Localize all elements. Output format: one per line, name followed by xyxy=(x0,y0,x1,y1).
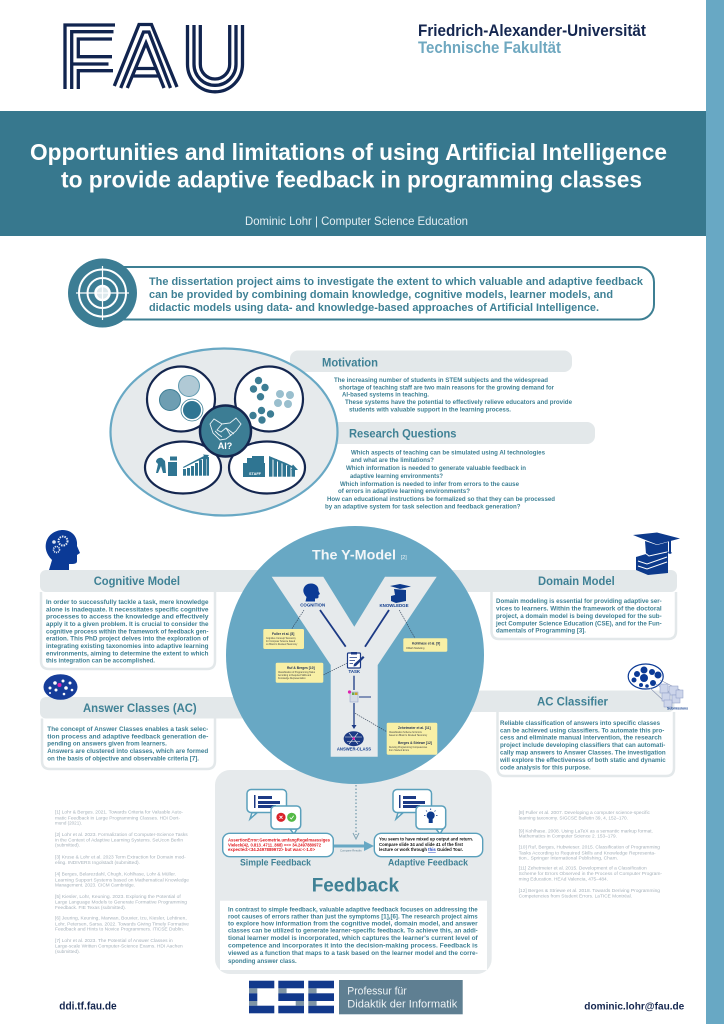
adaptive feedback message: You seem to have mixed up output and return. xyxy=(379,837,473,842)
title: Opportunities and limitations of using Artificial Intelligence xyxy=(30,139,667,165)
centre circle: AI handshake xyxy=(200,406,251,456)
body text: project include developing classifiers that can automati- xyxy=(500,742,665,749)
note: Fuller et al.: Cognitive Concept Taxonomy xyxy=(266,637,297,640)
references right: [11] Zehetmeier et al. 2015. Development of a Classification xyxy=(519,865,647,870)
university name: Friedrich-Alexander-Universität xyxy=(418,22,646,40)
arrow: code to answer class xyxy=(352,703,356,729)
panel: feedback xyxy=(215,770,492,974)
note: Ruf and Berges: Ruf & Berges [10] xyxy=(287,666,315,670)
text: research questions: Which information is needed to infer from errors to the cause xyxy=(340,482,520,488)
icon: target xyxy=(68,258,137,328)
references right: [9] Kohlhase. 2008. Using LaTeX as a semantic markup format. xyxy=(519,828,653,833)
university name: Technische Fakultät xyxy=(418,39,561,57)
body text: classes can be utilized to generate learner-specific feedback. To achieve this, an addi- xyxy=(228,928,478,935)
references right: [10] Ruf, Berges, Hubwieser. 2015. Classification of Programming xyxy=(519,845,661,850)
text area xyxy=(220,901,487,970)
sidebar xyxy=(706,0,724,1024)
body text: processes to access the knowledge and effectively xyxy=(46,614,209,621)
goal text: The dissertation project aims to investigate the extent to which valuable and adaptive feedback xyxy=(149,276,644,288)
note: Zehetmeier and Berges xyxy=(387,723,437,755)
references right: learning taxonomy. SIGCSE Bulletin 39, 4, 152–170. xyxy=(519,815,628,820)
note: Zehetmeier and Berges: from Student Errors xyxy=(389,749,410,752)
references left xyxy=(55,810,190,954)
node: cognition xyxy=(300,584,325,608)
body text: integrating existing taxonomies into adaptive learning xyxy=(46,643,209,650)
body text: to explore how information from the cognitive model, domain model, and answer xyxy=(228,921,478,928)
references right: Mathematics in Computer Science 2. 153–179. xyxy=(519,834,617,839)
centre circle: AI handshake: AI? xyxy=(218,441,232,451)
body text: code analysis for this purpose. xyxy=(500,764,591,771)
panel: project goal xyxy=(68,258,654,328)
simple feedback message xyxy=(223,833,333,857)
references left: [7] Lohr et al. 2023. The Potential of Answer Classes in xyxy=(55,938,173,943)
heading: research questions: Research Questions xyxy=(349,428,457,440)
body text: alone is inadequate. It necessitates specific cognitive xyxy=(46,606,209,613)
references left: [6] Jeuring, Keuning, Marwan, Bouvier, Izu, Kiesler, Lehtinen, xyxy=(55,916,187,921)
body text: tional learner model is incorporated, which captures the learner's current level of xyxy=(228,935,479,942)
arrow: simple to adaptive xyxy=(333,841,374,852)
heading: feedback: Feedback xyxy=(312,876,399,897)
body text: on the basis of objective and observable criteria [7]. xyxy=(47,755,199,762)
note: Zehetmeier and Berges: Berges & Striewe [12] xyxy=(398,741,432,745)
label: adaptive feedback: Adaptive Feedback xyxy=(388,858,469,868)
heading: the Y-model: The Y-Model xyxy=(312,546,396,562)
text: research questions: How can educational instructions be formalized so that they can be processed xyxy=(327,497,555,503)
circle: student groups xyxy=(147,366,215,432)
references right: [8] Fuller et al. 2007. Developing a computer science-specific xyxy=(519,810,651,815)
body text: can be achieved using classifiers. To automate this pro- xyxy=(500,727,664,734)
references left: in the Context of Adaptive Learning Systems. SeUcon Berlin xyxy=(55,837,184,842)
header bar: AC classifier xyxy=(400,690,674,712)
body text: vices to learners. Within the framework of the doctoral xyxy=(496,605,662,612)
body text: competence and incorporates it into the decision-making process. Feedback is xyxy=(228,942,478,949)
simple feedback message: AssertionError:Geometrie.umfangRegelmaessiges xyxy=(228,837,330,842)
text: research questions xyxy=(325,451,555,511)
circle: teaching staff shortage: STAFF xyxy=(249,472,262,476)
bubble: light bulb xyxy=(416,806,446,834)
references left: [4] Berges, Belarezdahl, Chugh, Kohlhase, Lohr & Müller. xyxy=(55,872,176,877)
note: Fuller et al. xyxy=(263,629,304,649)
references left: Large-scale Written Computer-Science Exams. HDI Aachen xyxy=(55,943,183,948)
simple feedback message: Vieleck(42, 0.813_4711_868) ==> 34.2497880972 xyxy=(228,842,321,847)
references right: Competencies from Student Errors. LaTICE Montréal. xyxy=(519,893,632,898)
note: Zehetmeier and Berges: Deriving Programming Competencies xyxy=(389,746,428,749)
circle: rising student numbers xyxy=(145,442,221,494)
body text: The concept of Answer Classes enables a task selec- xyxy=(47,726,208,733)
node: knowledge xyxy=(379,584,411,608)
footer: email: dominic.lohr@fau.de xyxy=(584,1000,684,1012)
body text: Domain modeling is essential for providing adaptive ser- xyxy=(496,598,662,605)
body text xyxy=(499,720,666,771)
body text: Reliable classification of answers into specific classes xyxy=(500,720,661,727)
note: Zehetmeier and Berges: based on Bloom's Revised Taxonomy xyxy=(389,735,428,737)
icon: head with gears xyxy=(46,530,80,570)
icon: graduation cap with books xyxy=(633,532,680,575)
bubble: adaptive feedback tool xyxy=(393,790,432,819)
adaptive feedback message: lecture or work through this Guided Tour. xyxy=(379,847,463,852)
heading: Cognitive Model xyxy=(94,575,180,588)
arrow: cognition to task xyxy=(320,610,346,647)
simple feedback message: expected:<34.2497889972> but was:<-1.0> xyxy=(228,847,315,852)
title: to provide adaptive feedback in programming classes xyxy=(61,166,642,192)
note: Ruf and Berges: According to Required Skills and xyxy=(278,674,312,677)
professorship label: Professur für xyxy=(347,985,407,997)
references left: mund (2021). xyxy=(55,821,82,826)
icon: student solution xyxy=(348,690,371,702)
references left: [3] Kruse & Lohr et al. 2023 Term Extraction for Domain mod- xyxy=(55,855,186,860)
title xyxy=(30,139,667,192)
body text xyxy=(46,599,209,665)
footer: website: ddi.tf.fau.de xyxy=(59,1000,117,1012)
text: research questions: adaptive learning environments? xyxy=(350,474,443,480)
citation: [2] xyxy=(401,555,407,561)
node: task: TASK xyxy=(348,669,361,674)
text: research questions: Which aspects of teaching can be simulated using AI technologies xyxy=(351,451,546,457)
note: Kohlhase et al.: OMath Modeling xyxy=(406,647,425,650)
note: Fuller et al.: Fuller et al. [8] xyxy=(272,632,294,636)
text: research questions: Which information is needed to generate valuable feedback in xyxy=(346,466,526,472)
body text: cess and eliminate manual intervention, the research xyxy=(500,735,662,742)
circle: teaching staff shortage xyxy=(229,442,305,494)
body text: ject Computer Science Education (CSE), and for the Fun- xyxy=(495,620,662,627)
body text: sponding answer class. xyxy=(228,958,297,965)
body text: will explore the effectiveness of both static and dynamic xyxy=(499,757,666,764)
header bar: answer classes xyxy=(40,697,310,718)
note: Fuller et al.: on Bloom's Revised Taxonomy xyxy=(266,644,298,646)
text: motivation: The increasing number of students in STEM subjects and the widespread xyxy=(334,378,548,384)
body text: root causes of errors rather than just the symptoms [1],[6]. The research project aims xyxy=(228,913,478,920)
note: Kohlhase et al. xyxy=(403,638,447,652)
panel: cognitive model xyxy=(41,575,215,669)
body text: cognitive process within the framework of feedback gen- xyxy=(46,628,208,635)
references right: ming Education. HEAd Valencia, 475–484. xyxy=(519,876,608,881)
icon: classifier xyxy=(628,664,688,710)
references right: [12] Berges & Striewe et al. 2018. Towards Deriving Programming xyxy=(519,888,661,893)
references left: Lohr, Petersen, Sarsa. 2022. Towards Giving Timely Formative xyxy=(55,921,190,926)
node: task xyxy=(348,652,364,674)
references right: tion.. Springer International Publishing, Cham. xyxy=(519,856,618,861)
references left: [5] Kiesler, Lohr, Keuning. 2023. Exploring the Potential of xyxy=(55,894,182,899)
references right: Scheme for Errors Observed in the Process of Computer Program- xyxy=(519,871,663,876)
diagram: AI ellipse xyxy=(110,348,338,516)
references left: [2] Lohr et al. 2023. Formalization of Computer-Science Tasks xyxy=(55,832,188,837)
body text: pending on answers given from learners. xyxy=(47,741,167,748)
goal text: can be provided by combining domain knowledge, cognitive models, learner models, and xyxy=(149,289,613,301)
text: research questions: and what are the limitations? xyxy=(351,458,434,464)
text: motivation: students with valuable support in the learning process. xyxy=(349,408,511,414)
text: research questions: by an adaptive system for task selection and feedback generation? xyxy=(325,505,521,511)
CSE logo xyxy=(249,981,334,1013)
references left: [1] Lohr & Berges. 2021. Towards Criteria for Valuable Auto- xyxy=(55,810,184,815)
adaptive feedback message: Compare slide 34 and slide 41 of the first xyxy=(379,842,463,847)
panel: domain model xyxy=(492,574,676,639)
text: research questions: of errors in adaptive learning environments? xyxy=(338,489,470,495)
note: Zehetmeier and Berges: Zehetmeier et al. [11] xyxy=(398,726,431,730)
note: Kohlhase et al.: Kohlhase et al. [9] xyxy=(412,642,440,646)
node: answer class xyxy=(337,731,371,752)
icon: classifier: Submissions xyxy=(667,706,688,710)
arrow: simple to adaptive: Compare Results xyxy=(340,848,362,852)
references right: Tasks According to Required Skills and Knowledge Representa- xyxy=(519,850,656,855)
arrow: task to code xyxy=(353,676,355,690)
body text: environments, aiming to determine the extent to which xyxy=(46,650,209,657)
body text: cally map answers to Answer Classes. The investigation xyxy=(500,750,666,757)
note: Ruf and Berges: Classification of Programming Tasks xyxy=(278,671,316,674)
references left: (submitted). xyxy=(55,843,80,848)
heading: Answer Classes (AC) xyxy=(83,702,197,715)
note: Ruf and Berges xyxy=(276,663,323,683)
professorship label: Didaktik der Informatik xyxy=(347,999,458,1011)
goal text: didactic models using data- and knowledge-based approaches of Artificial Intelligence. xyxy=(149,302,599,314)
node: cognition: COGNITION xyxy=(300,603,325,608)
references left: Learning Support Systems based on Mathematical Knowledge xyxy=(55,877,190,882)
arrow: Y-model to feedback xyxy=(353,785,359,839)
body text: tion process and adaptive feedback generation de- xyxy=(47,733,208,740)
note: Ruf and Berges: Knowledge Representation xyxy=(278,677,306,680)
title banner xyxy=(0,111,706,236)
note: Zehetmeier and Berges: Classification Scheme for Errors xyxy=(389,731,423,734)
note: Fuller et al.: for Computer Science based xyxy=(266,640,296,643)
body text: In order to successfully tackle a task, mere knowledge xyxy=(46,599,209,606)
author line: Dominic Lohr | Computer Science Education xyxy=(245,214,468,228)
bubble: pass or fail xyxy=(271,806,301,834)
body text xyxy=(47,726,209,762)
heading: Domain Model xyxy=(538,574,615,588)
references left: matic Feedback in Large Programming Classes. HDI Dort- xyxy=(55,815,181,820)
dashed connectors xyxy=(292,610,415,732)
panel: AC classifier xyxy=(498,695,674,776)
university name xyxy=(418,22,646,57)
bubble: simple feedback tool xyxy=(247,790,286,819)
text: motivation xyxy=(334,378,573,414)
references left: Management. 2023. CICM Cambridge. xyxy=(55,883,135,888)
text: motivation: These systems have the potential to effectively relieve educators and provide xyxy=(345,400,573,406)
references left: Feedback and Hints to Novice Programmers. ITiCSE Dublin. xyxy=(55,927,184,932)
professorship label xyxy=(339,980,463,1014)
FAU logo xyxy=(65,24,242,92)
body text: Answers are clustered into classes, which are formed xyxy=(47,748,209,755)
label: simple feedback: Simple Feedback xyxy=(240,858,312,868)
header bar: cognitive and domain model xyxy=(40,570,677,592)
panel: answer classes xyxy=(42,702,215,769)
body text: In contrast to simple feedback, valuable adaptive feedback focuses on addressing the xyxy=(228,906,478,913)
references left: eling. INDIVERS Ingolstadt (submitted). xyxy=(55,860,140,865)
body text: project, a domain model is being developed for the sub- xyxy=(496,613,662,620)
references left: (submitted). xyxy=(55,949,80,954)
body text: eration. This PhD project delves into the exploration of xyxy=(46,636,209,643)
goal text xyxy=(149,276,644,314)
body text xyxy=(228,906,479,965)
node: knowledge: KNOWLEDGE xyxy=(379,603,409,608)
diagram: the Y-model xyxy=(226,526,484,784)
text: motivation: shortage of teaching staff are two main reasons for the growing demand for xyxy=(339,385,555,391)
body text: damentals of Programming [3]. xyxy=(496,628,586,635)
icon: answer cluster xyxy=(44,674,78,700)
adaptive feedback message xyxy=(374,833,483,857)
body text xyxy=(495,598,662,635)
body text: viewed as a function that maps to a task based on the learner model and the corre- xyxy=(228,950,478,957)
body text: this integration can be accomplished. xyxy=(46,658,155,665)
node: answer class: ANSWER-CLASS xyxy=(337,747,371,752)
text: motivation: AI-based systems in teaching. xyxy=(342,393,429,399)
body text: apply it to a given problem. It is crucial to consider the xyxy=(46,621,209,628)
heading: motivation: Motivation xyxy=(322,358,378,370)
references right xyxy=(519,810,663,898)
circle: student clusters xyxy=(235,366,303,432)
Y shape xyxy=(272,577,437,757)
heading: AC Classifier xyxy=(537,695,608,709)
section bars: motivation and research questions xyxy=(290,350,595,444)
references left: Large Language Models to Generate Formative Programming xyxy=(55,899,188,904)
arrow: knowledge to task xyxy=(365,610,389,647)
references left: Feedback. FIE Texas (submitted). xyxy=(55,905,126,910)
